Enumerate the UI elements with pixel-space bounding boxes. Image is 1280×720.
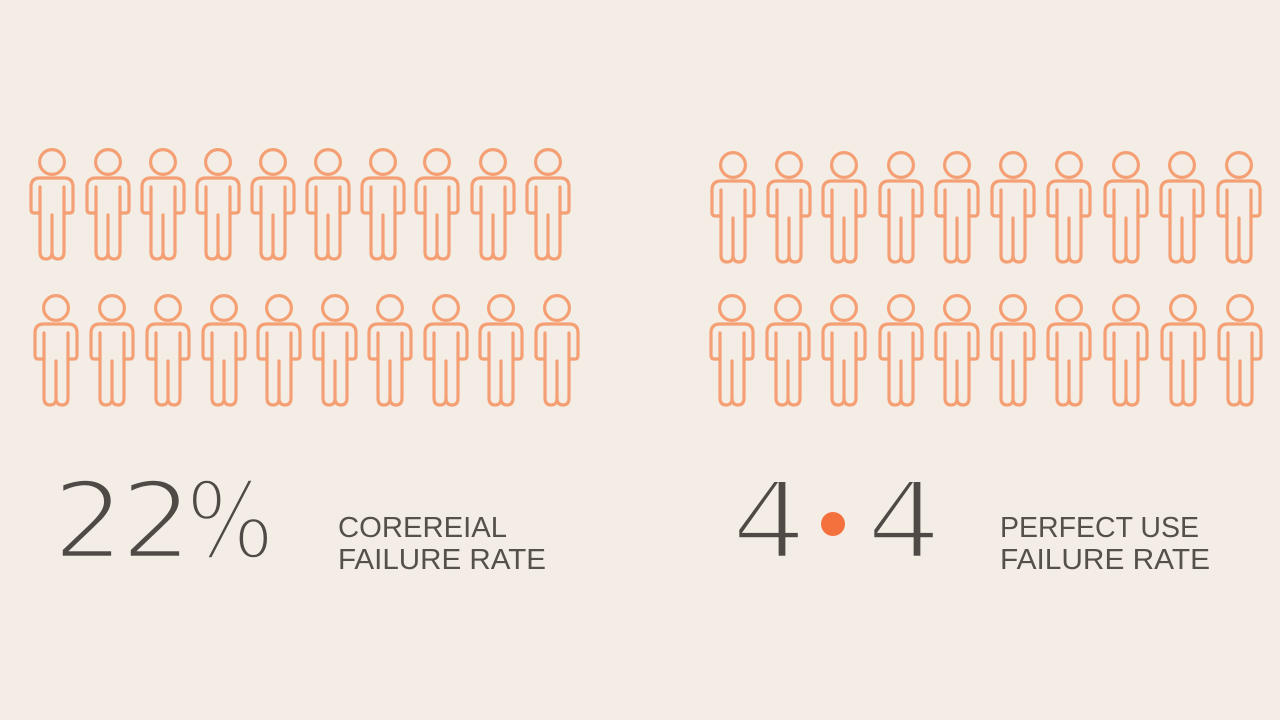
pictogram: bottom row of people, left [35,296,578,405]
statistic: 22%: % [186,460,274,584]
statistic: 4 • 4: 4 [731,460,807,584]
panel: corereial failure rate [31,150,578,584]
label: perfect use failure rate: FAILURE RATE [1000,544,1210,576]
label: corereial failure rate: FAILURE RATE [338,544,546,576]
statistic: 22%: 2 [52,460,125,584]
statistic: 4 • 4: 4 [866,460,942,584]
label: corereial failure rate: COREREIAL [338,512,507,544]
statistic: 22%: 2 [120,460,193,584]
pictogram: top row of people, left [31,150,569,259]
label: perfect use failure rate: PERFECT USE [1000,512,1199,544]
statistic: 4 • 4 [731,460,942,584]
pictogram: top row of people, right [712,153,1260,262]
pictogram: bottom row of people, right [711,296,1261,405]
panel: perfect use failure rate [711,153,1261,584]
